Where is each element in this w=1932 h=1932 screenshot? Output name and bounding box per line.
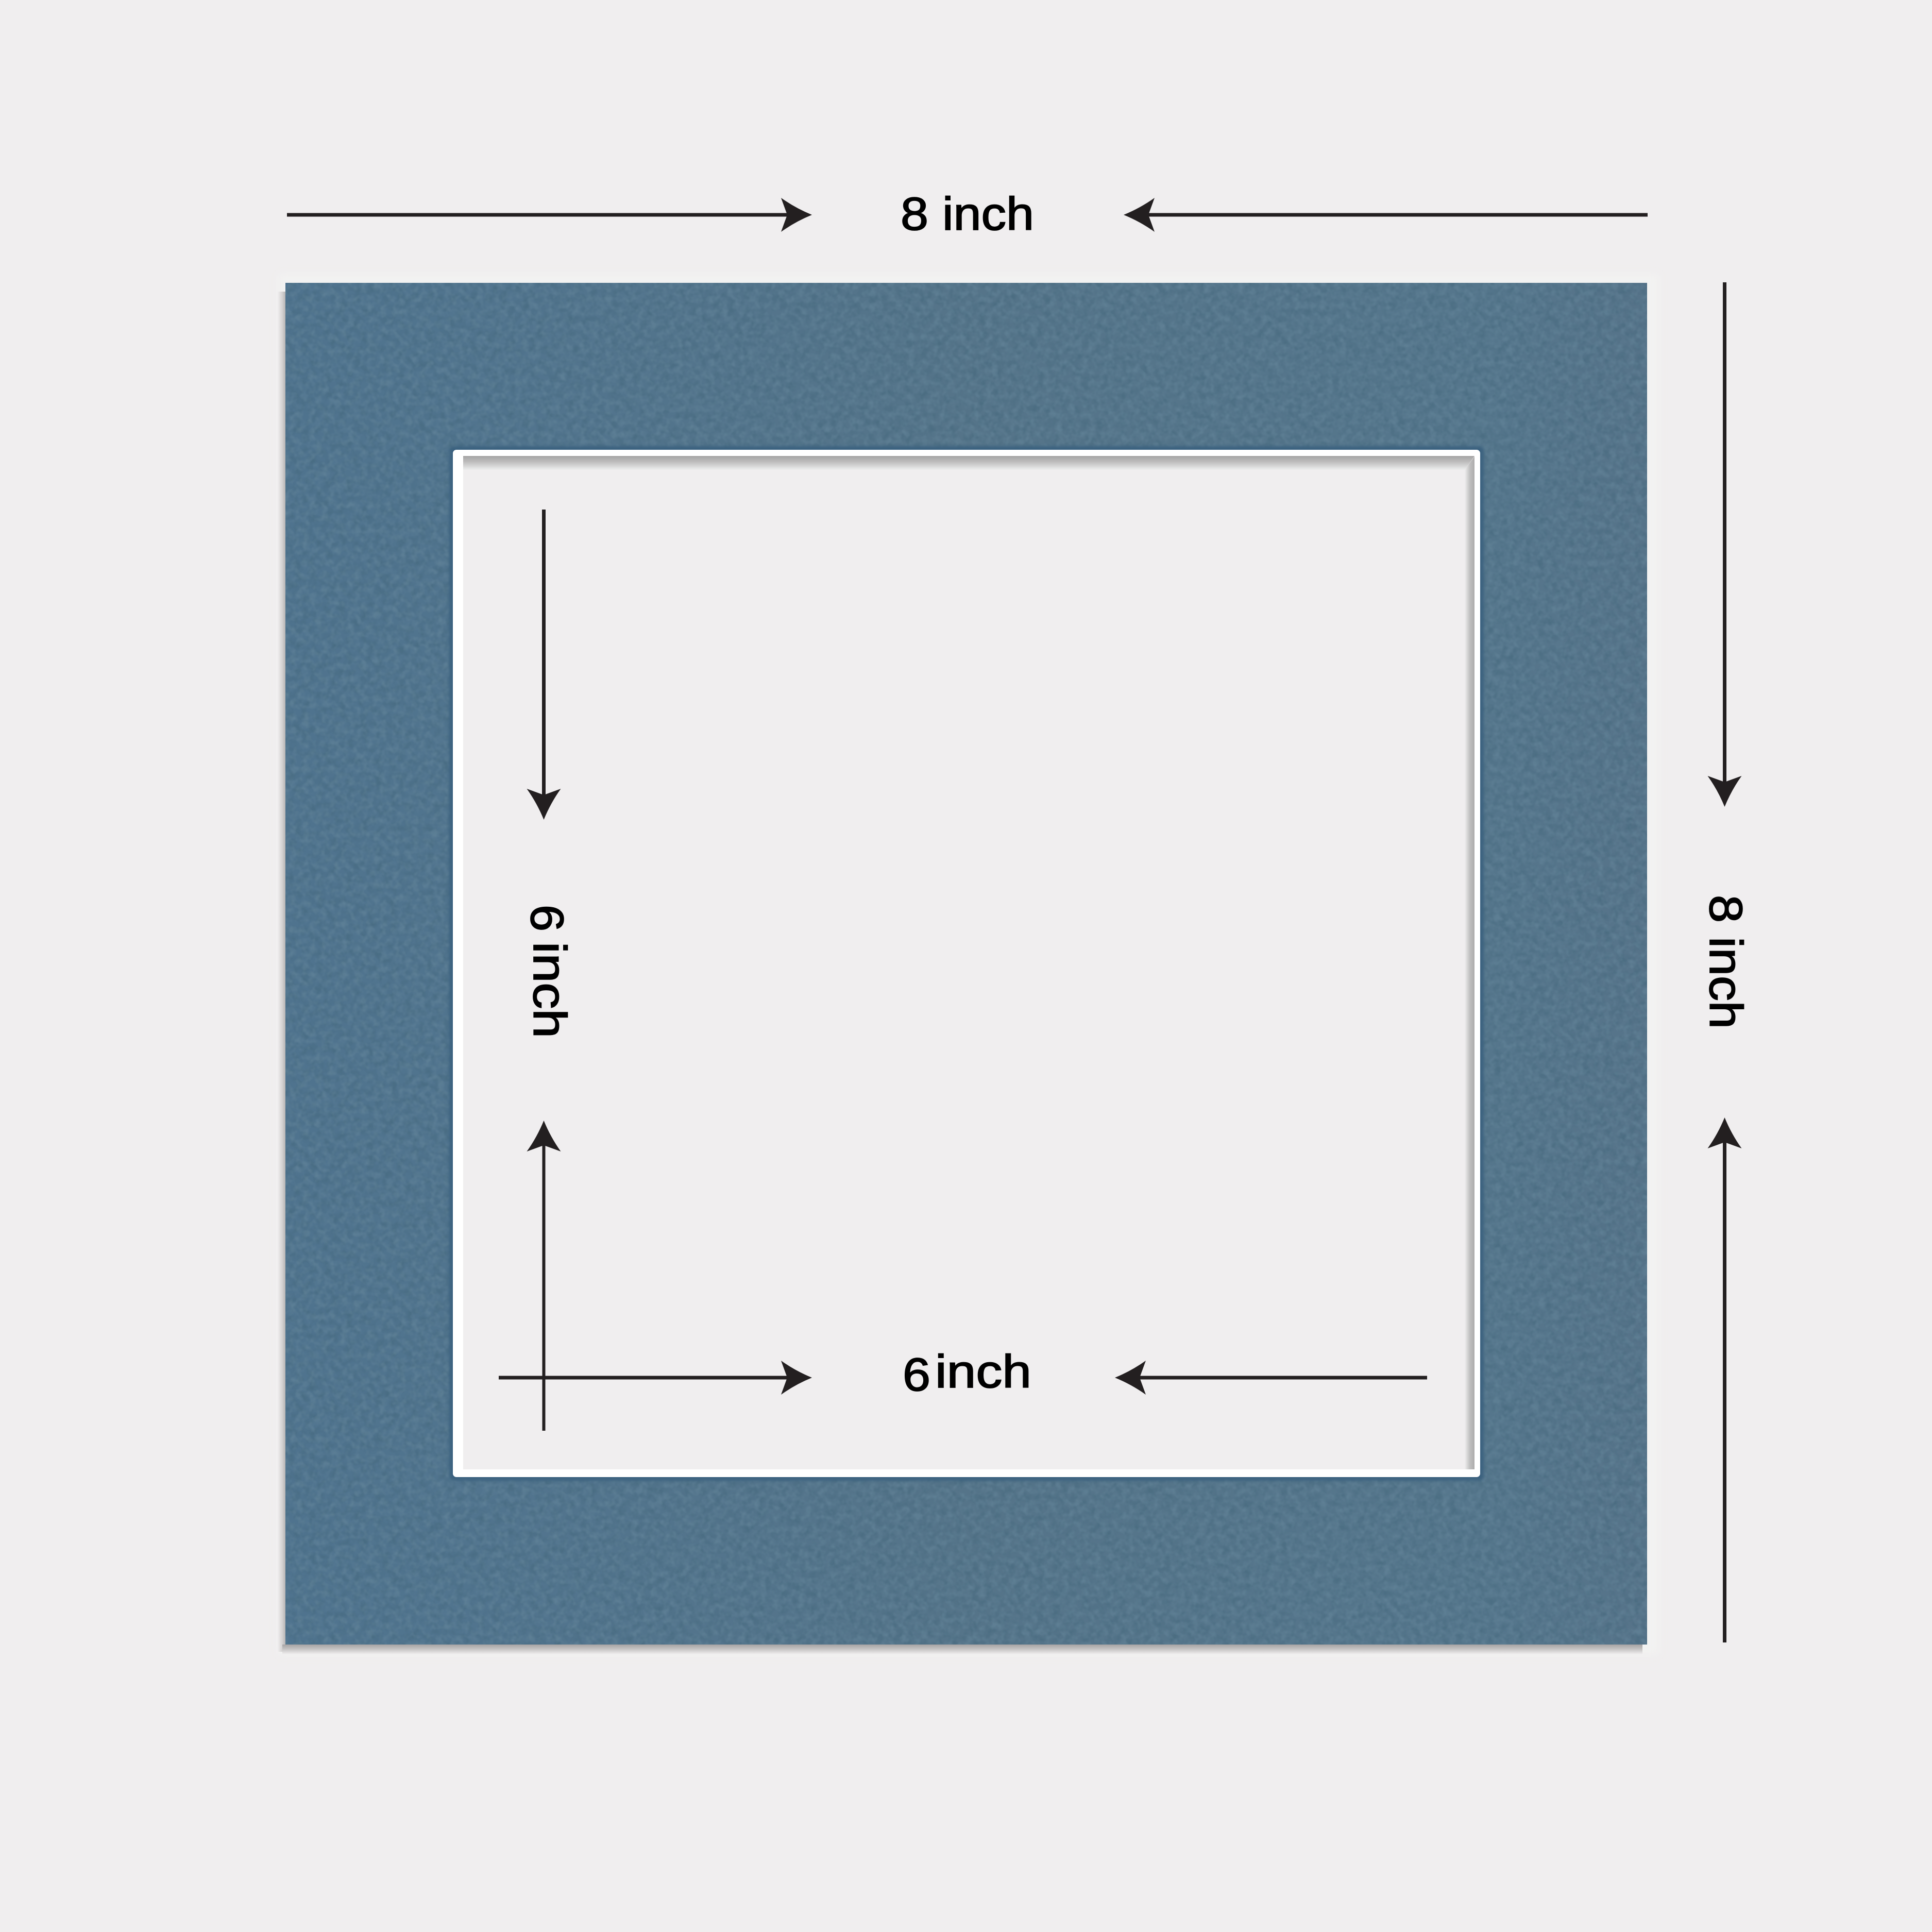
- arrow: top right pointing left: [1124, 198, 1648, 232]
- panel bottom shadow: [282, 1645, 1642, 1654]
- opening: window cut into mat: [449, 446, 1484, 1481]
- label: 8 inch top: 8 inch: [901, 189, 1034, 240]
- bottom inner dimension: 6 inch width: [499, 1346, 1427, 1401]
- bevel dark edge: [449, 446, 1484, 1481]
- inner top shadow: [463, 456, 1475, 470]
- arrow: top left pointing right: [287, 198, 812, 232]
- panel: blue mat board: [278, 274, 1659, 1655]
- arrow: right side pointing down: [1707, 282, 1741, 807]
- arrow: inner left pointing up: [527, 1121, 561, 1431]
- mat dark grain: [285, 283, 1647, 1645]
- arrow: inner bottom pointing left: [1115, 1361, 1427, 1395]
- label: 6 inch left: [521, 905, 575, 1038]
- label: 6 inch left: 6: [521, 905, 572, 931]
- label: 8 inch right: 8 inch: [1700, 895, 1751, 1029]
- arrow: inner bottom pointing right: [499, 1361, 812, 1395]
- mat light grain: [285, 283, 1647, 1645]
- arrow: right side pointing up: [1707, 1117, 1741, 1642]
- window interior: [463, 456, 1475, 1469]
- panel left shadow: [278, 292, 286, 1652]
- mat board surface: [285, 283, 1647, 1645]
- top dimension: 8 inch width: [287, 189, 1648, 240]
- right dimension: 8 inch height: [1700, 282, 1751, 1642]
- label: 6 inch bottom: 6: [903, 1349, 930, 1401]
- white bevel: [453, 450, 1480, 1477]
- arrow: inner left pointing down: [527, 510, 561, 820]
- panel halo: [278, 274, 1659, 1655]
- label: 6 inch bottom: [903, 1346, 1031, 1401]
- left inner dimension: 6 inch height: [521, 510, 575, 1431]
- inner right shadow: [1465, 456, 1475, 1469]
- label: 6 inch left: inch: [523, 942, 575, 1038]
- label: 6 inch bottom: inch: [935, 1346, 1031, 1398]
